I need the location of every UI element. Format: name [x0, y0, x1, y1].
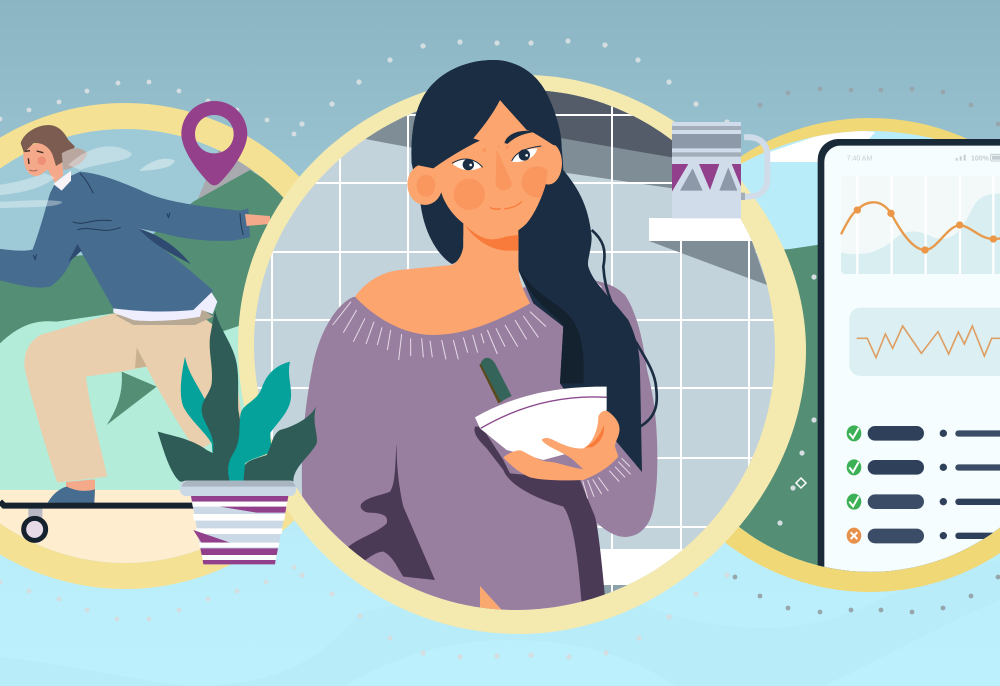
pants crease [135, 347, 147, 368]
shelf shadow [649, 241, 767, 285]
checklist [847, 425, 1000, 544]
blush [454, 166, 553, 210]
diamond marker [796, 478, 806, 488]
icon: map pin [181, 101, 247, 185]
figure: woman with bowl [302, 60, 657, 640]
ceiling [366, 90, 672, 188]
skateboard [0, 502, 197, 540]
pot body [191, 496, 288, 564]
chin shadow [465, 225, 518, 251]
dots over green hill [777, 274, 835, 526]
shoe [48, 487, 95, 503]
sweater wrinkles [33, 173, 243, 259]
wind trails [0, 146, 132, 208]
panel: right circle scenery [725, 118, 1000, 592]
nose [496, 149, 512, 190]
sweater [0, 172, 250, 312]
hair shadow strand [520, 270, 584, 383]
status bar [847, 154, 1000, 162]
pants [24, 313, 243, 483]
icon: mug [672, 122, 767, 218]
hand [503, 411, 620, 480]
loose hair strand [592, 230, 657, 427]
shirt hem [115, 310, 213, 325]
wall tile grid [255, 106, 774, 608]
panel: phone [818, 139, 1000, 606]
line chart [841, 176, 1000, 274]
status bar: 7:40 AM [847, 155, 872, 162]
face [433, 100, 552, 239]
head [21, 125, 87, 191]
mouth [490, 201, 522, 209]
status bar: 100% [971, 155, 990, 162]
lower white counter [600, 549, 684, 585]
figure: man on skateboard [0, 125, 270, 540]
panel: center circle room [230, 60, 806, 634]
sweater shadows [138, 228, 191, 264]
moles [482, 148, 486, 152]
eyebrow [505, 131, 533, 143]
hair back [411, 60, 642, 472]
plant in striped pot [158, 310, 317, 564]
spoon [479, 358, 512, 403]
hand [245, 214, 270, 226]
sweater body [302, 280, 657, 640]
sweater neckline ribbing [333, 282, 602, 360]
leaves [158, 310, 317, 482]
pot rim [180, 481, 296, 496]
bowl [475, 387, 607, 460]
ankle [66, 479, 95, 493]
eye right [512, 146, 541, 162]
zigzag panel [849, 308, 1000, 376]
cuff ribbing [583, 458, 631, 498]
ears [407, 164, 443, 205]
eye left [452, 159, 483, 170]
phone body [818, 139, 1000, 606]
shelf [649, 218, 752, 241]
neck and chest [355, 223, 530, 335]
fringe [411, 60, 562, 168]
panel: left circle landscape [0, 103, 300, 589]
